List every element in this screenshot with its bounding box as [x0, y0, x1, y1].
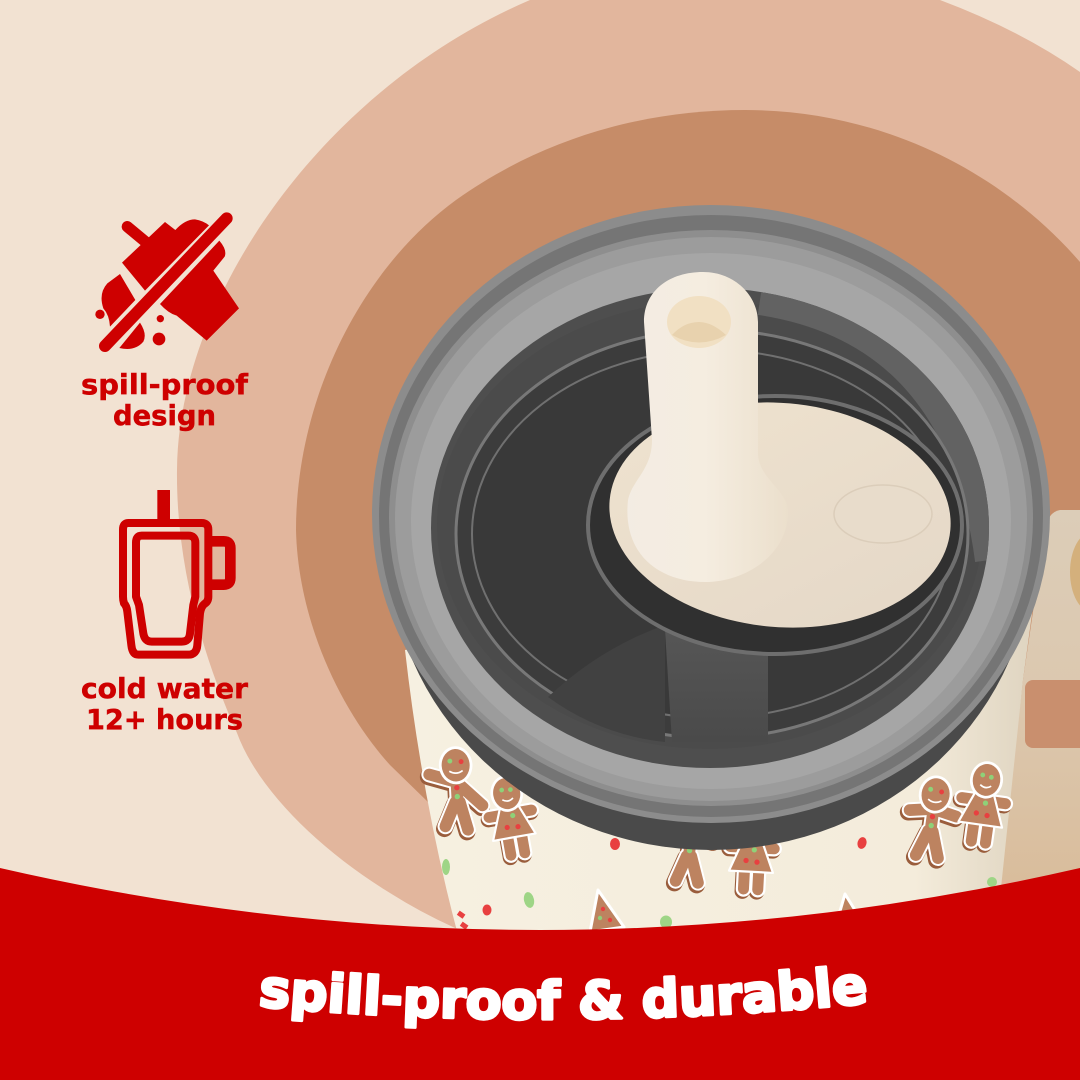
label: spill-proof design — [81, 368, 249, 432]
tumbler body with gingerbread pattern — [405, 540, 1042, 935]
cream disc — [600, 389, 960, 641]
label: cold water 12+ hours — [81, 672, 248, 736]
icon: no spill — [95, 218, 239, 349]
red bottom banner — [0, 868, 1080, 1080]
gingerbread figures — [427, 745, 1011, 932]
heading: spill-proof & durable: spill-proof & durable — [260, 965, 867, 1029]
tumbler handle — [1000, 510, 1080, 880]
label: cold water 12+ hours: 12+ hours — [86, 703, 243, 736]
label: cold water 12+ hours: cold water — [81, 672, 248, 705]
clear ring around disc — [588, 396, 962, 654]
lid lower dark band — [388, 236, 1034, 850]
background arc: inner brown — [296, 110, 1080, 810]
straw shaft below the disc — [665, 630, 768, 742]
disc button — [834, 485, 932, 543]
background arc: outer peach — [177, 0, 1080, 935]
inner rings — [456, 330, 968, 738]
lid lower interior shade — [548, 625, 665, 742]
confetti dots — [442, 836, 997, 930]
lid outer rim — [372, 205, 1050, 823]
label: spill-proof design: design — [113, 399, 216, 432]
handle opening — [1025, 680, 1080, 748]
handle inner gold spot — [1070, 532, 1080, 612]
straw opening — [667, 296, 731, 348]
lid inner opening — [431, 288, 989, 768]
tumbler lid — [372, 205, 1050, 850]
label: spill-proof design: spill-proof — [81, 368, 249, 401]
upper right inner band — [760, 300, 990, 560]
straw with bell base — [627, 272, 788, 582]
icon: tumbler — [123, 490, 230, 655]
